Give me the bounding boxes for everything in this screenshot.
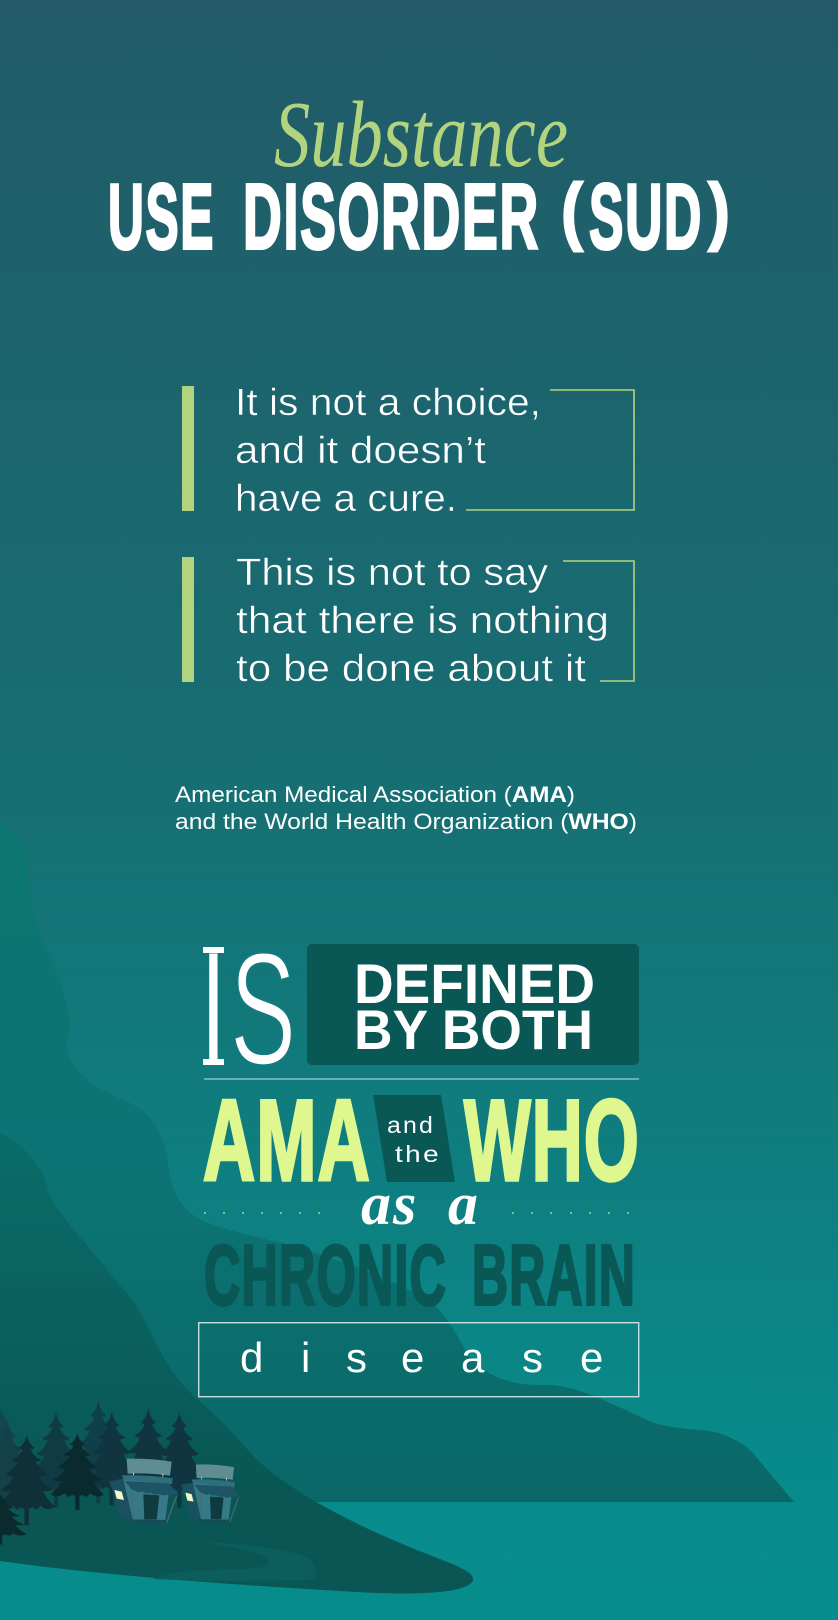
statement text: to be done about it: [236, 648, 586, 690]
word: AMA: AMA: [203, 1077, 371, 1205]
hut: left: [109, 1459, 179, 1523]
statement text: that there is nothing: [236, 600, 609, 642]
box: disease: [199, 1323, 639, 1397]
distant mountain: [0, 821, 794, 1502]
dotted rule: right: [512, 1212, 629, 1214]
pine trees: [0, 1401, 206, 1545]
statement text: and it doesn’t: [235, 430, 486, 472]
bracket: [466, 390, 634, 510]
word: WHO: WHO: [464, 1077, 640, 1205]
words: chronic brain: BRAIN: [472, 1228, 636, 1324]
title main line: DISORDER: [243, 164, 540, 268]
badge: defined by both: [307, 944, 639, 1065]
title main line: (: [561, 168, 583, 252]
statement text: have a cure.: [235, 478, 457, 520]
attribution text: American Medical Association ( AMA): [175, 782, 575, 807]
title main line: SUD: [589, 164, 703, 268]
statement text: It is not a choice,: [235, 382, 541, 424]
badge: defined by both: BY BOTH: [354, 998, 593, 1061]
hut: right: [181, 1464, 241, 1522]
title main line: ): [708, 168, 730, 252]
near mountain: [0, 1132, 473, 1593]
dotted rule: left: [204, 1212, 320, 1214]
badge: defined by both: DEFINED: [354, 952, 595, 1015]
tag: and the: the: [395, 1141, 441, 1167]
word: IS: S: [230, 919, 296, 1098]
statement text: This is not to say: [236, 552, 548, 594]
tag: and the: and: [387, 1112, 435, 1138]
accent bar: [182, 557, 194, 682]
attribution text: and the World Health Organization ( WHO ): [175, 809, 637, 834]
word: IS: I: [201, 919, 226, 1100]
bracket: [563, 561, 634, 681]
attribution text: [175, 782, 637, 834]
statement: something to be done: [182, 552, 634, 690]
title script line: Substance: [274, 83, 568, 187]
words: chronic brain: CHRONIC: [204, 1228, 447, 1324]
title: [108, 83, 730, 268]
scene: forest, huts and path: [0, 1401, 316, 1581]
word: IS: [201, 919, 296, 1100]
title main line: USE: [108, 164, 215, 268]
accent bar: [182, 386, 194, 511]
winding path: [147, 1523, 316, 1581]
statement text: [236, 552, 609, 690]
statement text: [235, 382, 541, 520]
box: disease: disease: [240, 1334, 603, 1381]
script: as a: asa: [361, 1171, 478, 1237]
statement: not a choice: [182, 382, 634, 520]
tag: and the: [373, 1095, 455, 1182]
